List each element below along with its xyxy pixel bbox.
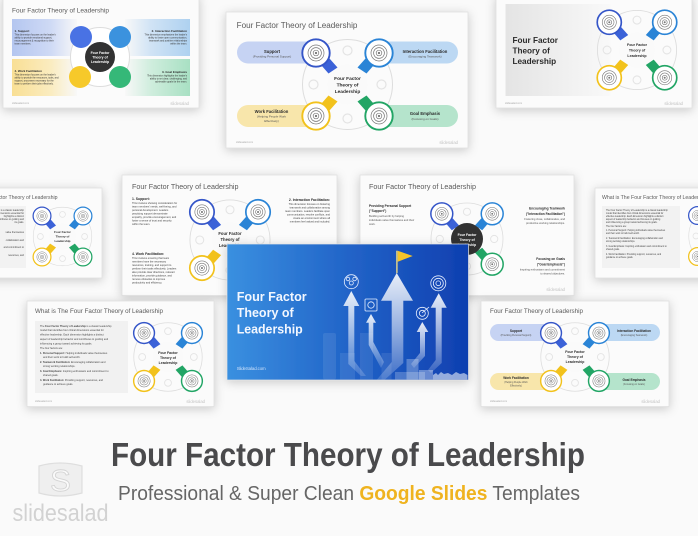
left text blocks: perform their tasks effectively. Leaders	[132, 266, 177, 270]
circular diagram: Four Factor	[91, 51, 110, 55]
cover title: Four Factor	[237, 289, 307, 304]
grey text panel: effective leadership. Each dimension highlights a distinct	[40, 332, 104, 336]
grey text panel: 4. Work Facilitation: Providing support, resources, and	[606, 253, 662, 256]
centre label: Four Factor	[158, 351, 178, 355]
right text block: 2. Interaction Facilitation:	[289, 198, 330, 202]
slide heading: Theory of	[512, 46, 550, 56]
right text block: teamwork and collaboration among	[290, 206, 331, 210]
centre label: Four Factor	[334, 76, 361, 82]
centre label	[54, 230, 72, 243]
left text blocks: information, provide guidance, and	[132, 274, 172, 278]
centre label: Leadership	[627, 54, 647, 58]
arrow icons	[344, 275, 446, 319]
grey text panel: highlights a distinct	[4, 215, 24, 218]
pills	[237, 42, 458, 127]
right text: to shared objectives.	[540, 272, 565, 276]
grey text panel: 3. Goal Emphasis: Inspiring enthusiasm and commitment to	[606, 245, 667, 248]
grey text panel: value themselves	[6, 231, 25, 234]
pill labels: (Focusing on Goals)	[623, 383, 645, 386]
slide heading	[512, 36, 559, 66]
grey text panel: strong working relationships.	[43, 364, 76, 368]
grey text panel: The Four Factor Theory of Leadership is a classic leadership	[40, 324, 112, 328]
pill labels: (Encouraging Teamwork)	[621, 334, 647, 337]
pill labels: Goal Emphasis	[410, 111, 441, 116]
left text blocks: foster a sense of trust and security	[132, 218, 172, 222]
grey text panel: guidance to achieve goals.	[43, 382, 73, 386]
pill labels: (Focusing on Goals)	[411, 117, 439, 121]
panel text: 4. Work Facilitation	[14, 69, 42, 73]
panel text: encouragement & recognition to their	[14, 40, 54, 42]
centre label: Leadership	[219, 243, 242, 248]
arrow: far left	[343, 291, 366, 376]
left text blocks: 4. Work Facilitation:	[132, 252, 164, 256]
centre label	[334, 76, 361, 95]
pill labels: Interaction Facilitation	[403, 49, 448, 54]
cover title: Leadership	[237, 322, 303, 336]
slide heading: Leadership	[512, 57, 556, 66]
slide title: Four Factor Theory of Leadership	[132, 184, 239, 191]
dark centre: Four Factor	[458, 233, 477, 237]
left text: ("Support")	[369, 209, 386, 213]
left text blocks: personal development. Leaders	[132, 208, 169, 212]
grey text panel: aspect of leadership behavior and focuses on guiding	[606, 218, 661, 221]
left text blocks: members have the necessary	[132, 260, 167, 264]
grey text panel: 3. Goal Emphasis: Inspiring enthusiasm and commitment to	[40, 369, 109, 373]
centre label: Leadership	[335, 89, 360, 95]
panel text: ability to foster open communication,	[148, 36, 187, 40]
footer: slidesalad.com	[12, 101, 29, 105]
cover title: Theory of	[237, 305, 294, 320]
grey text panel: model that identifies four critical dimensions essential for	[606, 212, 664, 215]
panel text: within the team.	[170, 42, 187, 46]
left text blocks: remove obstacles to improve	[132, 277, 166, 281]
right text: ("Goal Emphasis")	[537, 262, 565, 266]
right text block: communication, resolve conflicts, and	[287, 212, 331, 216]
cover footer: SlideSalad.com	[237, 366, 266, 371]
circular diagram	[302, 39, 393, 130]
panel text: This dimension focuses on the leader's	[14, 74, 57, 76]
centre label: Theory of	[629, 48, 646, 52]
slide title: Four Factor Theory of Leadership	[12, 8, 109, 14]
grey text panel	[602, 206, 680, 268]
right text: ("Interaction Facilitation")	[526, 212, 565, 216]
dark centre: Leadership	[458, 243, 476, 247]
grey text panel: and their work to build self-worth.	[606, 232, 640, 235]
grey text panel: The Four Factor Theory of Leadership is a classic leadership	[606, 209, 668, 212]
slide: middle-right text layout	[360, 175, 574, 296]
footer	[505, 101, 684, 106]
subheading: Professional & Super Clean Google Slides Templates	[118, 483, 580, 505]
pill labels: (Helping People Work	[504, 381, 528, 384]
centre label: Four Factor	[627, 43, 648, 47]
panel text: This dimension highlights the leader's	[147, 74, 188, 78]
circular diagram: Theory of	[92, 56, 109, 60]
left text blocks: practicing support demonstrate	[132, 212, 168, 216]
panel text: ability to set clear, challenging, and	[150, 78, 188, 80]
panel text: ability to provide emotional support,	[14, 36, 52, 40]
right text block: This dimension focuses on fostering	[289, 202, 331, 206]
panel text: This dimension emphasizes the leader's	[145, 34, 188, 36]
left text blocks	[132, 197, 177, 284]
slide heading: Four Factor	[512, 36, 559, 45]
left text: work.	[369, 222, 376, 226]
slide: lower-right pill layout	[481, 301, 669, 406]
right text block: members feel valued and included.	[290, 220, 330, 224]
centre label	[565, 350, 585, 364]
centre label: Theory of	[337, 82, 359, 88]
grey text panel: 1. Personal Support: Helping individuals value themselves	[40, 351, 108, 355]
slide: far-left partial	[0, 188, 102, 278]
grey text panel: effective leadership. Each dimension highlights a distinct	[606, 215, 664, 218]
slide title: Four Factor Theory of Leadership	[237, 21, 358, 30]
centre label: Leadership	[159, 361, 177, 365]
right text: Encouraging Teamwork	[529, 206, 565, 210]
arrow: fifth	[428, 293, 447, 373]
circular diagram	[69, 26, 131, 88]
logo text: slidesalad	[12, 500, 108, 527]
slide title: Four Factor Theory of Leadership	[369, 184, 476, 191]
footer: slidesalad	[641, 399, 661, 404]
main heading: Four Factor Theory of Leadership	[111, 436, 585, 473]
left text blocks: This involves ensuring that team	[132, 256, 169, 260]
left text blocks: empathy, provide encouragement, and	[132, 215, 177, 219]
pill labels: (Helping People Work	[257, 114, 287, 118]
left text: individuals value themselves and their	[369, 218, 414, 222]
centre label: Four Factor	[54, 230, 72, 234]
panel text: teamwork and positive relationships	[149, 40, 188, 42]
grey text panel: 4. Work Facilitation: Providing support, resources, and	[40, 378, 104, 382]
centre label: Theory of	[56, 234, 69, 238]
circular diagram	[689, 207, 698, 265]
panel text: support, processes necessary for the	[14, 80, 54, 82]
footer: slidesalad	[546, 287, 566, 292]
circular diagram	[134, 323, 202, 391]
grey text panel	[35, 321, 128, 393]
footer: slidesalad	[186, 399, 206, 404]
panel text: achievable goals for the team.	[155, 80, 187, 84]
circular diagram	[597, 10, 677, 90]
panels	[12, 19, 190, 96]
grey text panel: The four factors are:	[40, 346, 63, 350]
skyline	[323, 333, 468, 380]
centre label: Leadership	[54, 239, 71, 243]
pill labels: Goal Emphasis	[622, 378, 646, 382]
pill labels: Work Facilitation	[503, 376, 529, 380]
pill labels: (Providing Personal Support)	[501, 334, 532, 337]
grey text panel: 1. Personal Support: Helping individuals value themselves	[606, 229, 666, 232]
grey text panel: shared goals.	[43, 373, 59, 377]
pill labels: (Encouraging Teamwork)	[408, 54, 442, 58]
right text block	[285, 198, 331, 224]
footer: slidesalad.com	[35, 399, 52, 403]
footer	[35, 399, 206, 404]
slide: top-centre pill layout	[226, 12, 468, 148]
footer: slidesalad.com	[505, 101, 522, 105]
footer: slidesalad	[170, 101, 190, 106]
right text: productive working relationships.	[526, 221, 565, 225]
pill labels: Support	[264, 49, 281, 54]
grey text panel: guidance to achieve goals.	[606, 256, 634, 259]
centre label	[158, 351, 178, 365]
panel text: team members.	[14, 42, 31, 46]
right text block: team members. Leaders facilitate open	[285, 209, 331, 213]
right text: Focusing on Goals	[536, 257, 565, 261]
circular diagram	[190, 200, 270, 280]
left text blocks: team members' needs, well-being, and	[132, 204, 177, 208]
grey text panel: 2. Teamwork Facilitation: Encouraging collaboration and	[606, 237, 664, 240]
grey text panel: shared goals.	[606, 248, 620, 251]
footer: slidesalad.com	[490, 399, 507, 403]
slide: middle-left text layout	[122, 175, 337, 296]
slide: lower-left what-is layout	[27, 301, 214, 406]
pill labels: Support	[510, 329, 523, 333]
grey text panel: and influencing a group toward achieving its goals.	[606, 221, 658, 224]
centre label: Four Factor	[565, 350, 585, 354]
left text: Building self-worth by helping	[369, 214, 404, 218]
grey text panel: 2. Teamwork Facilitation: Encouraging collaboration and	[40, 360, 106, 364]
pill labels: Interaction Facilitation	[617, 329, 651, 333]
grey text panel: aspect of leadership behavior and contributes to guiding and	[40, 337, 109, 341]
left text blocks: within the team.	[132, 222, 150, 226]
left text blocks: also provide clear directions, relevant	[132, 270, 175, 274]
right text block: create an environment where all	[293, 216, 330, 220]
grey text panel: The four factors are:	[606, 225, 627, 228]
panel text: ability to provide the resources, tools, and	[14, 76, 59, 80]
grey text panel: and their work to build self-worth.	[43, 355, 81, 359]
left text blocks: resources, training, and support to	[132, 263, 172, 267]
cover title	[237, 289, 307, 336]
centre label	[218, 231, 242, 248]
left text: Providing Personal Support	[369, 204, 412, 208]
panel text: 2. Interaction Facilitation	[152, 29, 187, 33]
arrow: fourth	[411, 322, 428, 368]
pill labels: (Providing Personal Support)	[253, 54, 291, 58]
grey text panel: its goals.	[15, 221, 24, 224]
footer	[490, 399, 661, 404]
pill labels	[253, 49, 448, 123]
circular diagram	[541, 323, 609, 391]
dark centre	[451, 223, 483, 255]
slide: far-right partial	[595, 188, 698, 278]
pill labels: Work Facilitation	[255, 109, 289, 114]
centre label: Theory of	[567, 355, 584, 359]
footer: slidesalad	[664, 101, 684, 106]
centre label: Theory of	[160, 356, 177, 360]
grey text panel: influencing a group toward achieving its goals.	[40, 342, 92, 346]
grey text panel: strong working relationships.	[606, 240, 635, 243]
panel text: 3. Goal Emphasis	[162, 70, 187, 74]
pill labels: Effectively)	[264, 119, 279, 123]
centre label	[627, 43, 648, 58]
panel text: team to perform their jobs effectively.	[14, 82, 54, 86]
panel text: 1. Support	[14, 29, 29, 33]
main cover slide	[227, 244, 468, 380]
left text blocks: This involves showing consideration for	[132, 201, 177, 205]
centre label: Theory of	[220, 237, 240, 242]
circular diagram: Leadership	[91, 60, 109, 64]
centre label: Four Factor	[218, 231, 242, 236]
footer	[12, 101, 190, 106]
right text: Inspiring enthusiasm and commitment	[520, 268, 565, 272]
grey text panel: model that identifies four critical dimensions essential for	[40, 328, 104, 332]
circular diagram	[33, 207, 92, 266]
slide title: Four Factor Theory of Leadership	[490, 309, 584, 315]
left text	[369, 204, 414, 226]
grey text panel: and commitment to	[4, 246, 25, 249]
slide: top-left four panels	[3, 0, 199, 108]
footer: slidesalad	[439, 140, 459, 145]
grey text panel: is a classic leadership	[1, 209, 25, 212]
grey text panel	[0, 206, 26, 268]
icon: S cube: S	[50, 463, 71, 498]
left text blocks: productivity and efficiency.	[132, 280, 162, 284]
footer	[236, 140, 459, 145]
logo: slidesalad	[12, 463, 108, 527]
slide: top-right title layout	[496, 0, 692, 108]
dark centre: Theory of	[459, 238, 476, 242]
grey text panel: collaboration and	[6, 239, 25, 242]
centre label: Leadership	[566, 360, 584, 364]
arrow: second	[366, 314, 384, 368]
panel text	[14, 29, 188, 86]
panel text: This dimension focuses on the leader's	[14, 34, 57, 36]
grey text panel: resources, and	[8, 254, 25, 257]
arrow: centre with flag	[377, 251, 413, 380]
footer: slidesalad.com	[236, 140, 253, 144]
right text	[520, 206, 565, 276]
pill labels	[501, 329, 651, 388]
slide title: What is The Four Factor Theory of Leadership	[35, 309, 164, 315]
grey panel	[506, 4, 610, 96]
pill labels: Effectively)	[510, 384, 522, 388]
pills	[490, 324, 660, 390]
left text blocks: 1. Support:	[132, 197, 150, 201]
circular diagram	[431, 203, 503, 275]
right text: Fostering close, collaborative, and	[524, 217, 565, 221]
